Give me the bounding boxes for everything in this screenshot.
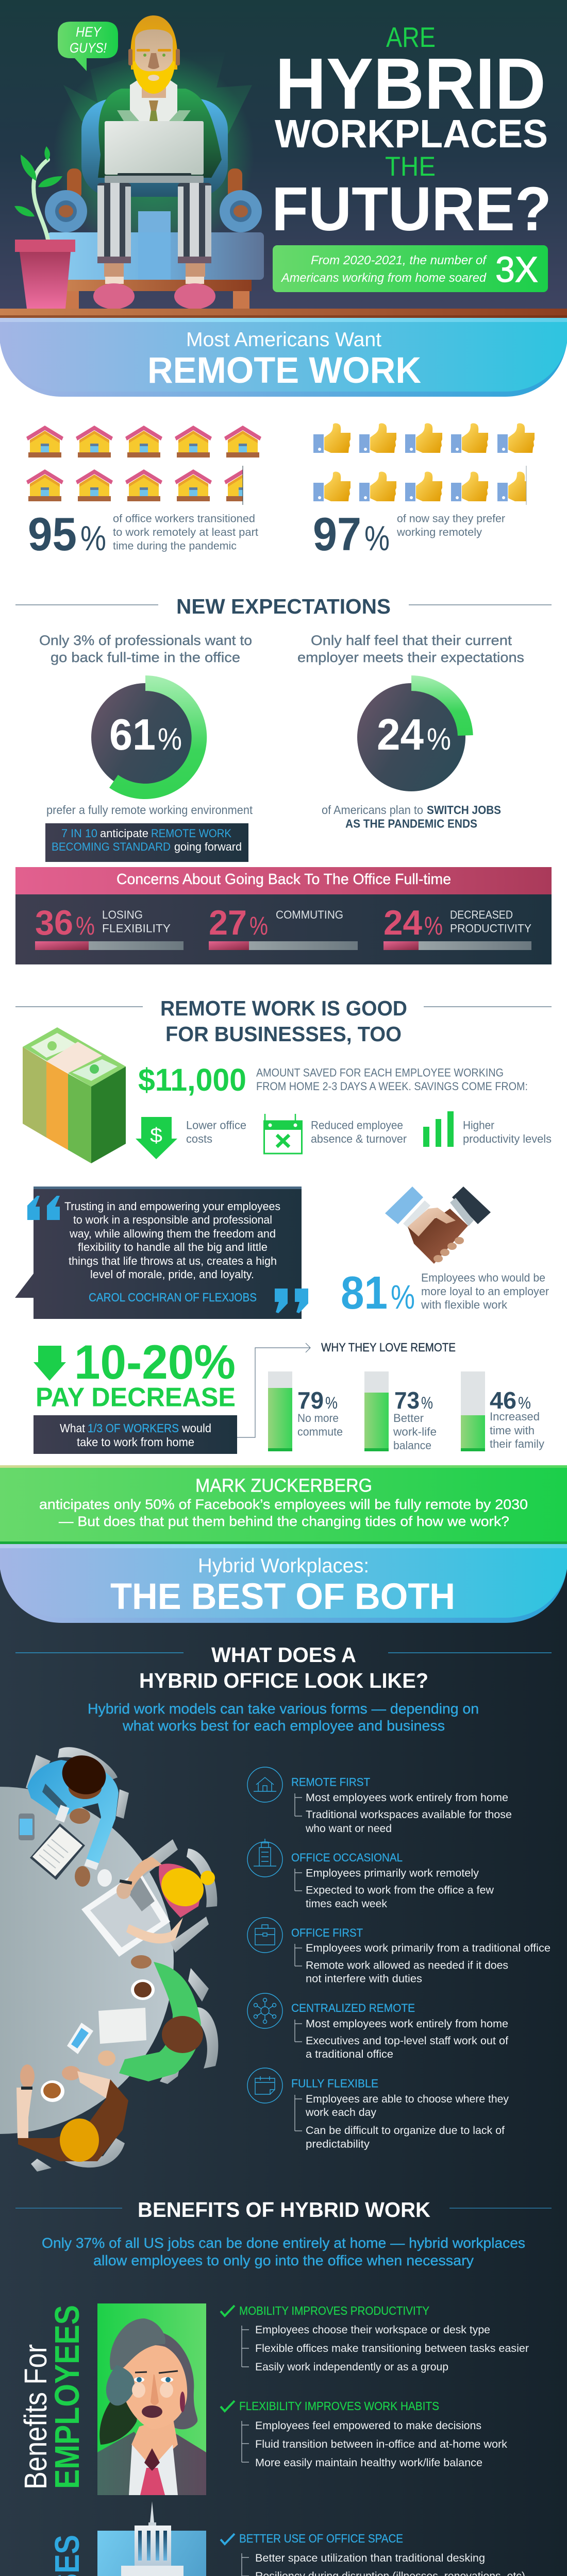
rotated label: benefits for employees: Benefits For	[18, 2344, 53, 2489]
panel: why they love remote	[268, 1341, 544, 1452]
stat text: 97 percent: 97	[313, 509, 361, 561]
stat text: 95 percent: to work remotely at least part	[113, 527, 258, 538]
stat: 24 percent decreased productivity: 24	[383, 903, 422, 942]
person: blue shirt	[26, 1747, 129, 1887]
heading: benefits of hybrid work	[15, 2198, 552, 2268]
model: office first	[247, 1918, 551, 1985]
stat: 24 percent decreased productivity: DECREASED	[450, 908, 513, 921]
quote panel: Carol Cochran: flexibility to handle all the big and little	[78, 1241, 268, 1253]
model: centralized remote: Executives and top-level staff work out of	[306, 2035, 508, 2047]
panel: 24 percent donut: employer meets their expectations	[297, 650, 524, 665]
callout: 7 in 10: BECOMING STANDARD	[52, 840, 171, 853]
text: lower office costs: Lower office	[186, 1119, 246, 1131]
model: office occasional: times each week	[306, 1898, 388, 1910]
heading: remote work is good for businesses: REMOTE WORK IS GOOD	[160, 996, 407, 1020]
donut chart: 24 percent	[357, 675, 473, 791]
benefit: office space: Better space utilization than traditional desking	[255, 2552, 485, 2564]
stat: 36 percent losing flexibility: LOSING	[102, 908, 143, 921]
stat: 11000 dollars saved: FROM HOME 2-3 DAYS A WEEK. SAVINGS COME FROM:	[256, 1080, 528, 1093]
panel: 61 percent donut	[39, 633, 253, 862]
icon array: houses	[26, 426, 261, 505]
model: fully flexible: FULLY FLEXIBLE	[291, 2077, 378, 2090]
heading: benefits of hybrid work: allow employees to only go into the office when necessary	[93, 2252, 474, 2268]
stat: 81 percent: %	[391, 1278, 415, 1316]
stat: 81 percent: 81	[341, 1267, 388, 1319]
stat: 11000 dollars saved: AMOUNT SAVED FOR EACH EMPLOYEE WORKING	[256, 1066, 504, 1079]
title	[272, 21, 552, 244]
callout: 3X: 3X	[495, 249, 538, 290]
bar: 79 percent no more commute: commute	[297, 1425, 343, 1438]
callout: one third of workers: take to work from home	[77, 1435, 194, 1449]
text: lower office costs: costs	[186, 1132, 212, 1145]
benefit: flexibility: More easily maintain healthy work/life balance	[255, 2457, 482, 2469]
band: Mark Zuckerberg	[0, 1465, 567, 1544]
panel: why they love remote: WHY THEY LOVE REMOTE	[321, 1341, 456, 1354]
stat text: 97 percent: working remotely	[396, 527, 482, 538]
section banner: remote work: Most Americans Want	[186, 329, 381, 351]
icon: handshake	[385, 1187, 491, 1264]
speech bubble: GUYS!	[70, 40, 107, 56]
text: lower office costs	[186, 1119, 246, 1145]
model: remote first: Most employees work entirely from home	[306, 1792, 508, 1804]
icon: calendar circle	[247, 2068, 282, 2103]
panel: 95 percent stat	[26, 426, 261, 561]
title: FUTURE?	[272, 174, 552, 244]
shelf	[0, 309, 567, 318]
icon: lower costs down arrow	[136, 1117, 177, 1159]
stat text: 95 percent: time during the pandemic	[113, 540, 237, 552]
model: office occasional: Expected to work from the office a few	[306, 1885, 494, 1896]
text: higher productivity: Higher	[463, 1119, 494, 1131]
stat: 11000 dollars saved	[138, 1062, 528, 1097]
text: reduced absence: Reduced employee	[311, 1119, 403, 1131]
model: remote first	[247, 1767, 512, 1835]
model: office first: not interfere with duties	[306, 1973, 422, 1985]
stat: 24 percent decreased productivity	[383, 903, 531, 950]
title: HYBRID	[275, 43, 546, 124]
benefit: mobility	[221, 2304, 529, 2373]
quote panel: Carol Cochran: CAROL COCHRAN OF FLEXJOBS	[89, 1291, 257, 1304]
stat: 27 percent commuting	[209, 903, 358, 950]
panel: concerns about going back: Concerns About Going Back To The Office Full-time	[116, 871, 451, 888]
benefit: office space	[221, 2532, 525, 2576]
stat text: 97 percent: %	[364, 519, 390, 558]
icon: calendar with cross	[263, 1114, 303, 1154]
stat: 36 percent losing flexibility: FLEXIBILITY	[102, 922, 171, 935]
panel: concerns about going back	[15, 867, 552, 964]
stat text: 97 percent	[313, 509, 505, 561]
panel: 61 percent donut: go back full-time in the office	[51, 650, 240, 665]
model: office occasional: OFFICE OCCASIONAL	[291, 1851, 403, 1864]
stat: 27 percent commuting: 27	[209, 903, 247, 942]
heading: benefits of hybrid work: Only 37% of all US jobs can be done entirely at home — hybrid workplaces	[42, 2235, 525, 2251]
panel: benefits for employees	[18, 2303, 529, 2495]
panel: hero header	[0, 0, 567, 318]
model: remote first: REMOTE FIRST	[291, 1776, 370, 1789]
heading: what does a hybrid office look like: HYBRID OFFICE LOOK LIKE?	[139, 1669, 428, 1692]
model: remote first: Traditional workspaces available for those	[306, 1809, 512, 1821]
person: green shirt	[98, 1962, 218, 2084]
icon: network circle	[247, 1993, 282, 2028]
panel: 24 percent donut: of Americans plan to	[322, 803, 423, 817]
callout: 7 in 10	[45, 823, 248, 862]
donut chart: 61 percent	[91, 675, 207, 799]
section banner: remote work	[0, 318, 567, 397]
quote panel: Carol Cochran: way, while allowing them the freedom and	[69, 1227, 276, 1240]
heading: benefits of hybrid work: BENEFITS OF HYBRID WORK	[138, 2198, 430, 2222]
quote panel: Carol Cochran: Trusting in and empowering your employees	[64, 1200, 280, 1213]
bar: 46 percent family time: Increased	[490, 1410, 540, 1423]
model: office first: Remote work allowed as needed if it does	[306, 1960, 508, 1972]
model: centralized remote	[247, 1993, 508, 2060]
quote panel: Carol Cochran: level of morale, pride, and loyalty.	[90, 1268, 254, 1281]
section banner: best of both	[0, 1544, 567, 1623]
bar: 73 percent better balance: Better	[393, 1412, 424, 1425]
bar: 73 percent better balance: 73	[394, 1387, 420, 1414]
donut chart: 24 percent: %	[427, 722, 451, 756]
panel: 24 percent donut	[297, 633, 524, 831]
model: centralized remote: CENTRALIZED REMOTE	[291, 2002, 415, 2014]
callout: 7 in 10: going forward	[174, 840, 242, 853]
title: THE	[385, 151, 436, 182]
benefit: flexibility: FLEXIBILITY IMPROVES WORK HABITS	[239, 2399, 439, 2413]
objects: phone and document	[19, 1814, 112, 1887]
bar: 73 percent better balance: balance	[393, 1439, 431, 1452]
panel: pay decrease: 10-20%	[74, 1335, 236, 1389]
model: centralized remote: a traditional office	[306, 2048, 393, 2060]
panel: benefits for businesses	[18, 2501, 547, 2576]
benefit: flexibility: Fluid transition between in-office and at-home work	[255, 2438, 508, 2450]
bar: 79 percent no more commute: %	[325, 1394, 338, 1412]
stat: 36 percent losing flexibility	[35, 903, 184, 950]
callout: 3X: Americans working from home soared	[280, 271, 487, 285]
benefit: mobility: Flexible offices make transitioning between tasks easier	[255, 2343, 529, 2354]
benefit: office space: BETTER USE OF OFFICE SPACE	[239, 2532, 403, 2545]
stat: 27 percent commuting: %	[249, 911, 268, 940]
heading: new expectations: NEW EXPECTATIONS	[176, 595, 391, 618]
bar: 46 percent family time	[461, 1371, 544, 1451]
benefit: mobility: Employees choose their workspace or desk type	[255, 2324, 490, 2336]
model: fully flexible: predictability	[306, 2139, 370, 2150]
model: fully flexible: work each day	[305, 2107, 377, 2119]
benefit: mobility: Easily work independently or as a group	[255, 2361, 448, 2373]
stat: 36 percent losing flexibility: %	[76, 911, 95, 940]
callout: 3X: From 2020-2021, the number of	[311, 253, 487, 267]
panel: pay decrease	[34, 1335, 237, 1454]
stat text: 95 percent: of office workers transitioned	[113, 513, 255, 524]
callout: 7 in 10: REMOTE WORK	[151, 827, 231, 840]
bar: 46 percent family time: time with	[490, 1424, 535, 1437]
heading: what does a hybrid office look like	[15, 1643, 552, 1734]
heading: what does a hybrid office look like: what works best for each employee and business	[122, 1718, 445, 1734]
illustration: stack of money	[23, 1027, 126, 1163]
benefit: flexibility: Employees feel empowered to make decisions	[255, 2420, 481, 2432]
stat: 81 percent: more loyal to an employer	[421, 1285, 549, 1298]
callout: one third of workers	[34, 1415, 237, 1454]
text: reduced absence	[311, 1119, 407, 1145]
model: fully flexible: Can be difficult to organize due to lack of	[306, 2125, 505, 2137]
stat text: 97 percent: of now say they prefer	[397, 513, 505, 524]
rotated label: benefits for employees: EMPLOYEES	[48, 2305, 87, 2489]
stat: 11000 dollars saved: $11,000	[138, 1062, 246, 1097]
stat: 24 percent decreased productivity: %	[424, 911, 443, 940]
callout: 7 in 10: 7 IN 10	[61, 827, 97, 840]
model: fully flexible: Employees are able to choose where they	[306, 2093, 509, 2105]
quote panel: Carol Cochran	[15, 1187, 308, 1319]
stat: 81 percent	[341, 1267, 549, 1319]
panel: 61 percent donut: prefer a fully remote working environment	[46, 803, 253, 817]
model: office occasional: Employees primarily work remotely	[306, 1867, 479, 1879]
panel: 24 percent donut: Only half feel that their current	[311, 633, 512, 648]
benefit: mobility: MOBILITY IMPROVES PRODUCTIVITY	[239, 2304, 429, 2317]
icon: lower costs down arrow: $	[150, 1124, 162, 1147]
icon: office tower circle	[247, 1839, 282, 1877]
band: Mark Zuckerberg: MARK ZUCKERBERG	[195, 1475, 372, 1496]
stat text: 95 percent: 95	[28, 509, 77, 561]
callout: one third of workers: 1/3 OF WORKERS	[88, 1421, 179, 1435]
illustration: overhead view of office table	[0, 1747, 218, 2172]
model: office first: OFFICE FIRST	[291, 1926, 363, 1939]
heading: remote work is good for businesses	[15, 996, 552, 1046]
dark section background	[0, 1544, 567, 2576]
illustration: businesswoman portrait	[97, 2303, 206, 2495]
icon array: thumbs up	[313, 423, 535, 505]
callout: one third of workers: What	[60, 1421, 86, 1435]
donut chart: 24 percent: 24	[377, 710, 424, 759]
stat: 81 percent: with flexible work	[421, 1298, 508, 1311]
text: reduced absence: absence & turnover	[311, 1132, 407, 1145]
bar: 73 percent better balance: %	[421, 1394, 433, 1412]
arrow: connector to why they love remote	[237, 1343, 310, 1437]
bar: 79 percent no more commute: No more	[297, 1412, 339, 1425]
band: Mark Zuckerberg: anticipates only 50% of Facebook’s employees will be fully remote by 2030	[39, 1497, 528, 1512]
quote panel: Carol Cochran: to work in a responsible and professional	[73, 1213, 272, 1226]
stat: 36 percent losing flexibility: 36	[35, 903, 73, 942]
rotated label: benefits for employees	[18, 2305, 87, 2489]
text: higher productivity	[463, 1119, 552, 1145]
section banner: best of both: THE BEST OF BOTH	[110, 1577, 455, 1617]
heading: what does a hybrid office look like: Hybrid work models can take various forms — depending on	[88, 1701, 479, 1717]
title: WORKPLACES	[275, 112, 548, 156]
person: yellow hair with laptop	[81, 1839, 217, 1969]
stat: 24 percent decreased productivity: PRODUCTIVITY	[450, 922, 531, 935]
bar: 79 percent no more commute: 79	[297, 1387, 324, 1414]
stat: 81 percent: Employees who would be	[421, 1272, 545, 1284]
model: office first: Employees work primarily from a traditional office	[306, 1942, 551, 1954]
illustration: skyscraper	[97, 2501, 206, 2576]
icon: home circle	[247, 1767, 282, 1802]
model: centralized remote: Most employees work entirely from home	[306, 2018, 508, 2030]
panel: pay decrease: PAY DECREASE	[36, 1383, 236, 1413]
person: brown jacket	[16, 2064, 128, 2172]
stat text: 95 percent: %	[80, 519, 106, 558]
panel: 24 percent donut: AS THE PANDEMIC ENDS	[345, 817, 477, 831]
bar: 79 percent no more commute	[268, 1371, 343, 1451]
model: fully flexible	[247, 2068, 509, 2150]
heading: remote work is good for businesses: FOR BUSINESSES, TOO	[165, 1022, 402, 1046]
stat: 27 percent commuting: COMMUTING	[276, 908, 343, 921]
icon: down arrow	[34, 1346, 66, 1381]
icon: rising bars	[423, 1111, 454, 1147]
section banner: best of both: Hybrid Workplaces:	[198, 1555, 369, 1577]
callout: 7 in 10: anticipate	[100, 827, 148, 840]
icon: opening quote	[27, 1196, 60, 1220]
speech bubble: HEY	[76, 24, 102, 40]
callout: one third of workers: would	[181, 1421, 211, 1435]
bar: 46 percent family time: %	[518, 1394, 531, 1412]
objects: coffee, papers and tablet	[67, 1979, 155, 2054]
bar: 46 percent family time: their family	[490, 1437, 544, 1450]
heading: what does a hybrid office look like: WHAT DOES A	[211, 1643, 356, 1667]
panel: 97 percent stat	[313, 423, 535, 561]
speech bubble	[58, 22, 118, 71]
quote panel: Carol Cochran: things that life throws at us, creates a high	[69, 1255, 277, 1267]
bar: 73 percent better balance: work-life	[393, 1425, 437, 1438]
bar: 73 percent better balance	[364, 1371, 437, 1452]
model: remote first: who want or need	[305, 1823, 392, 1835]
rotated label: benefits for businesses	[18, 2535, 87, 2576]
icon: briefcase circle	[247, 1918, 282, 1953]
panel: 61 percent donut: Only 3% of professionals want to	[39, 633, 252, 648]
title: ARE	[386, 21, 436, 53]
donut chart: 61 percent: 61	[109, 710, 156, 759]
model: office occasional	[247, 1839, 494, 1910]
band: Mark Zuckerberg: — But does that put them behind the changing tides of how we work?	[59, 1514, 509, 1529]
donut chart: 61 percent: %	[158, 722, 182, 756]
stat text: 95 percent	[28, 509, 258, 561]
bar: 46 percent family time: 46	[490, 1387, 516, 1414]
benefit: flexibility	[221, 2399, 508, 2469]
icon: closing quote	[275, 1289, 308, 1313]
illustration: potted plant	[14, 146, 75, 309]
text: higher productivity: productivity levels	[463, 1132, 552, 1145]
panel: 24 percent donut: SWITCH JOBS	[427, 803, 501, 817]
section banner: remote work: REMOTE WORK	[147, 350, 421, 391]
illustration: man working on laptop on a couch	[45, 15, 264, 309]
callout: 3X	[273, 245, 548, 292]
